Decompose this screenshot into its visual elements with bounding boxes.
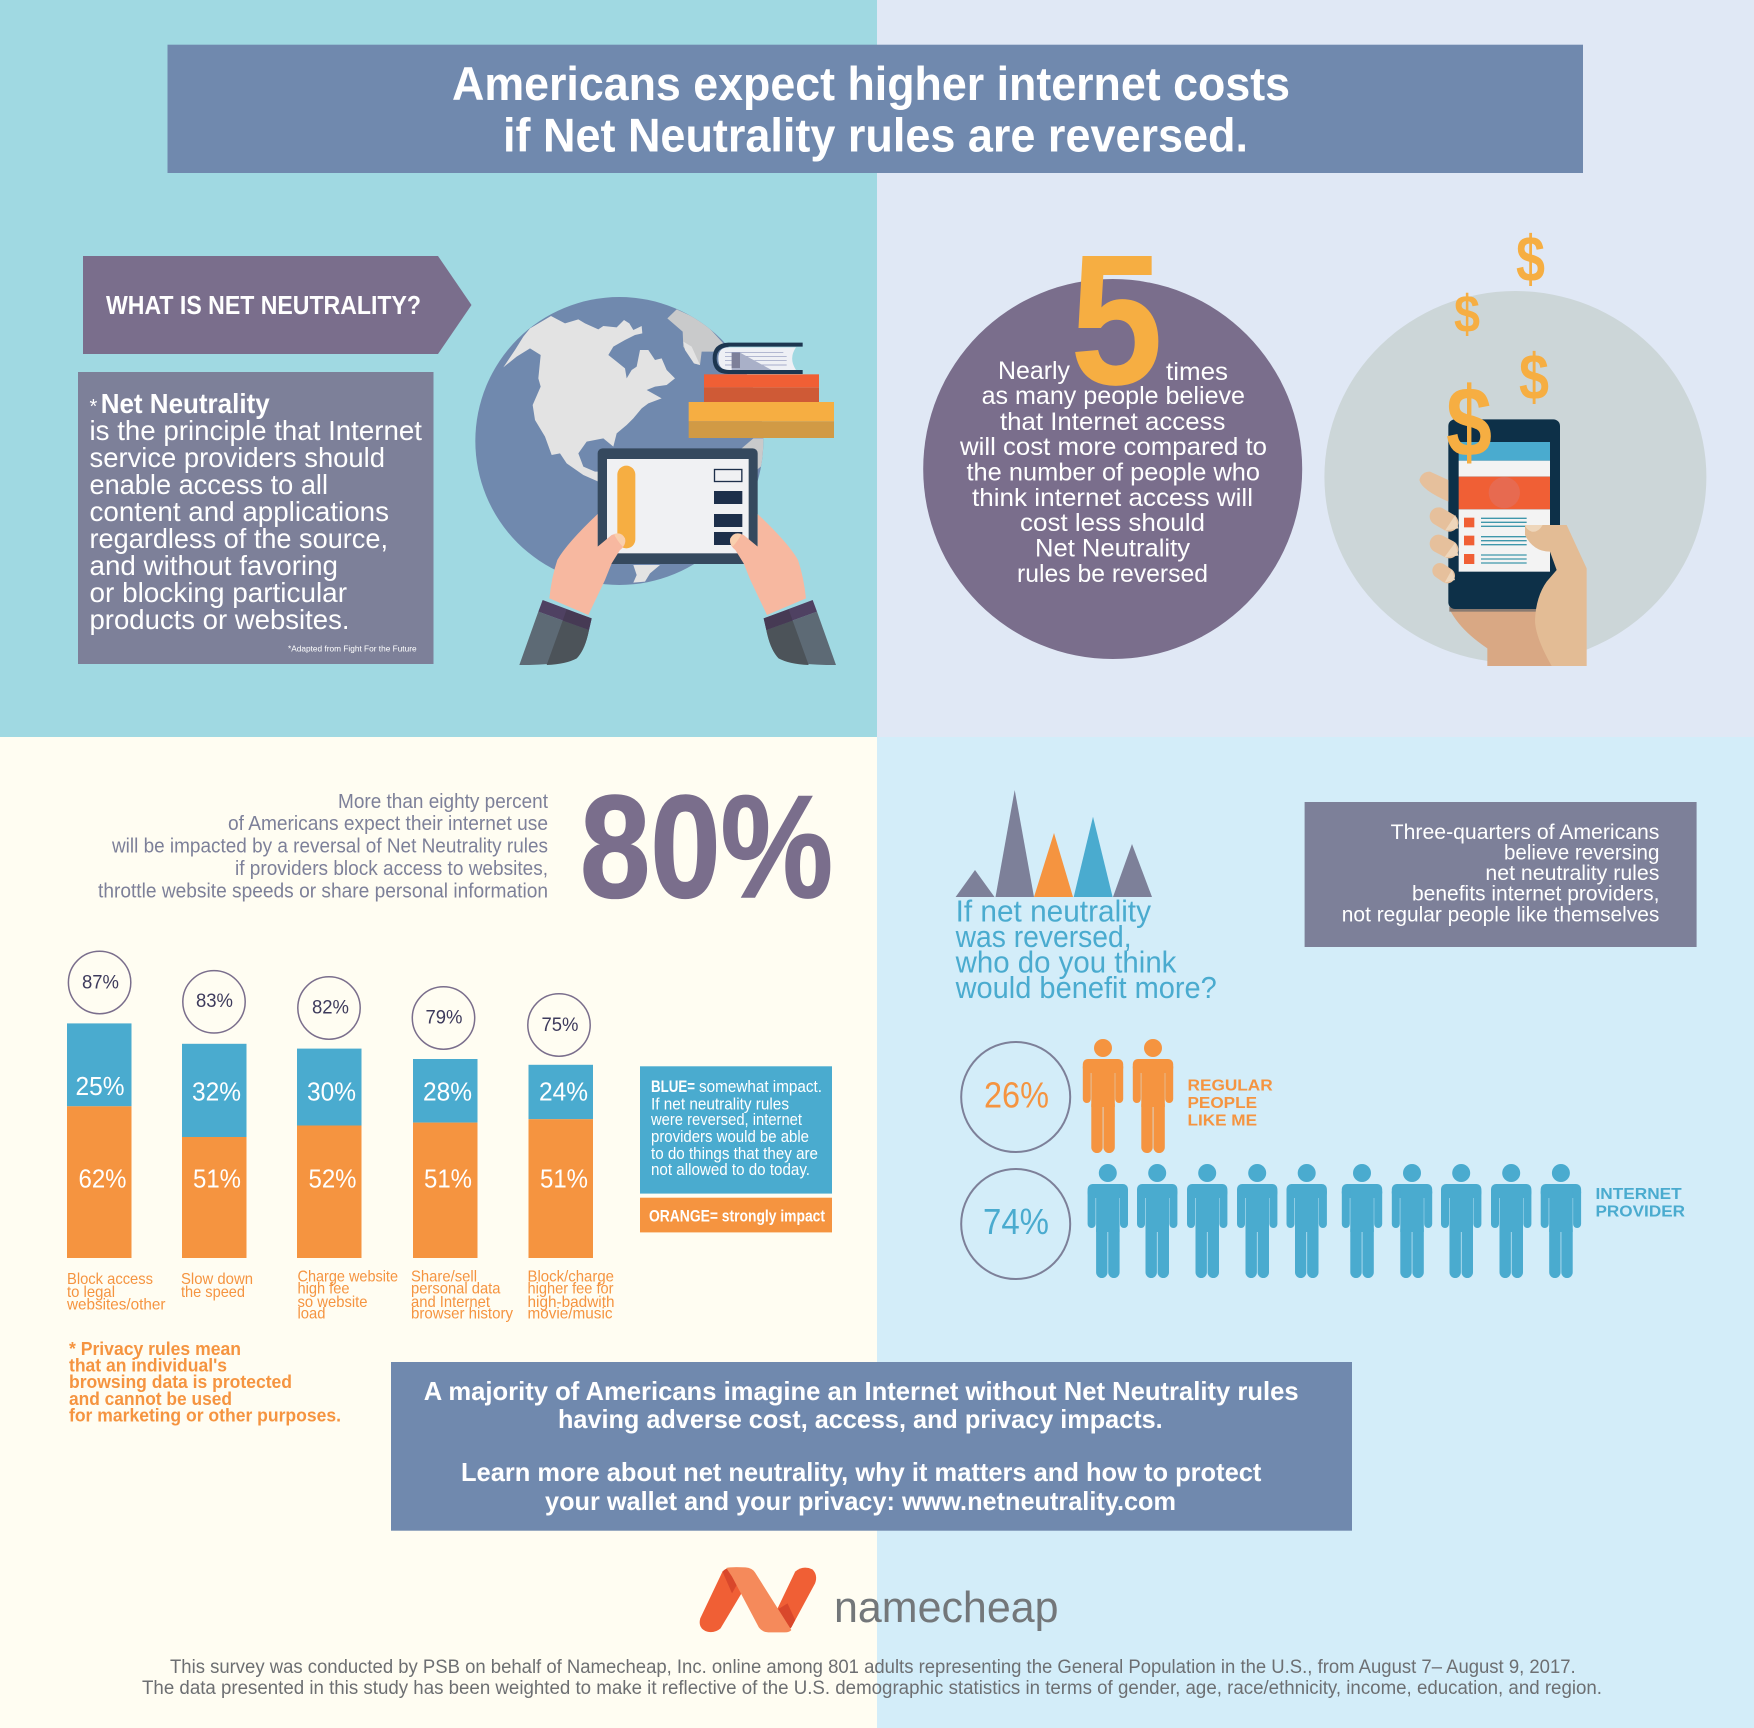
heading: who would benefit more: was reversed, bbox=[955, 919, 1132, 954]
banner: majority of Americans and call to action: Learn more about net neutrality, why it matters and how to protect bbox=[461, 1457, 1262, 1487]
legend: orange strongly impact bbox=[640, 1198, 832, 1232]
note: privacy rules bbox=[69, 1339, 341, 1426]
icon: left hand and sleeve bbox=[519, 514, 625, 665]
legend: blue somewhat impact: somewhat impact. bbox=[699, 1078, 822, 1096]
note: privacy rules: browsing data is protected bbox=[69, 1372, 292, 1392]
logo mark bbox=[700, 1567, 816, 1632]
legend: blue somewhat impact: providers would be able bbox=[651, 1128, 809, 1146]
bar: block/charge 75%: movie/music bbox=[528, 1306, 612, 1323]
bar: charge website 82%: 82% bbox=[312, 997, 349, 1018]
icon: globe bbox=[475, 297, 767, 585]
bar: block access 87%: 87% bbox=[82, 973, 119, 994]
bar: charge website 82%: so website bbox=[298, 1294, 368, 1311]
icon: phone and hand bbox=[1419, 419, 1587, 666]
icon: dollar signs: $ bbox=[1446, 366, 1492, 477]
bar: block access 87% bbox=[66, 951, 166, 1313]
text block: more than eighty percent: will be impacted by a reversal of Net Neutrality rules bbox=[111, 834, 548, 858]
icon: tablet bbox=[598, 448, 758, 564]
panel: net neutrality definition: regardless of the source, bbox=[90, 523, 388, 554]
bar: block/charge 75% bbox=[528, 994, 614, 1323]
heading: who would benefit more: would benefit more? bbox=[955, 970, 1217, 1005]
panel: net neutrality definition: enable access to all bbox=[90, 469, 328, 500]
bar: share/sell 79%: Share/sell bbox=[411, 1269, 477, 1286]
panel: net neutrality definition: is the principle that Internet bbox=[90, 415, 422, 446]
bar: block/charge 75%: 75% bbox=[542, 1015, 579, 1036]
stat: 26% regular people: REGULAR bbox=[1188, 1078, 1273, 1095]
stat: 74% internet provider: INTERNET bbox=[1596, 1186, 1682, 1203]
panel: net neutrality definition: products or websites. bbox=[90, 604, 350, 635]
banner: majority of Americans and call to action: having adverse cost, access, and privacy impacts. bbox=[558, 1404, 1163, 1434]
arrow heading: what is net neutrality bbox=[83, 256, 472, 354]
panel: nearly 5 times circle: that Internet access bbox=[1000, 408, 1225, 436]
text block: more than eighty percent bbox=[98, 790, 548, 902]
bar: charge website 82% bbox=[297, 977, 398, 1323]
icon: dollar signs bbox=[1446, 222, 1549, 477]
text block: more than eighty percent: of Americans expect their internet use bbox=[228, 812, 548, 835]
big number: 80%: 80% bbox=[580, 765, 833, 928]
bar: share/sell 79%: and Internet bbox=[411, 1294, 491, 1311]
bar: block/charge 75%: 51% bbox=[540, 1163, 588, 1193]
bar: block/charge 75%: Block/charge bbox=[528, 1269, 614, 1286]
stat: 74% internet provider: PROVIDER bbox=[1596, 1204, 1685, 1221]
panel: nearly 5 times circle: 5 bbox=[1070, 217, 1163, 424]
bar: slow down 83%: 51% bbox=[193, 1163, 241, 1193]
panel: nearly 5 times circle: the number of people who bbox=[966, 459, 1260, 487]
icon: dollar signs: $ bbox=[1454, 285, 1480, 344]
title banner: Americans expect higher internet costs bbox=[452, 57, 1290, 110]
heading: who would benefit more bbox=[955, 894, 1217, 1005]
logo: namecheap: namecheap bbox=[834, 1583, 1058, 1632]
bar: charge website 82%: high fee bbox=[298, 1280, 350, 1298]
panel: three-quarters of Americans: not regular people like themselves bbox=[1342, 904, 1659, 927]
legend: blue somewhat impact bbox=[640, 1066, 832, 1194]
banner: majority of Americans and call to action bbox=[391, 1362, 1352, 1531]
heading: who would benefit more: who do you think bbox=[955, 945, 1177, 980]
panel: nearly 5 times circle: as many people believe bbox=[982, 382, 1245, 410]
bar: block/charge 75%: high-badwith bbox=[528, 1294, 614, 1311]
panel: net neutrality definition: *Adapted from Fight For the Future bbox=[288, 644, 417, 654]
note: privacy rules: and cannot be used bbox=[69, 1389, 232, 1409]
logo: namecheap bbox=[700, 1567, 1058, 1632]
bar: charge website 82%: load bbox=[298, 1306, 326, 1323]
legend: blue somewhat impact: BLUE= bbox=[651, 1078, 695, 1096]
panel: three-quarters of Americans: believe reversing bbox=[1504, 841, 1659, 864]
bar: charge website 82%: Charge website bbox=[298, 1269, 398, 1286]
text block: more than eighty percent: throttle website speeds or share personal information bbox=[98, 880, 548, 902]
bar: block access 87%: 25% bbox=[76, 1071, 124, 1101]
banner: majority of Americans and call to action: A majority of Americans imagine an Internet without Net Neutrality rules bbox=[424, 1376, 1299, 1406]
heading: who would benefit more: If net neutrality bbox=[956, 894, 1151, 929]
title banner: if Net Neutrality rules are reversed. bbox=[503, 109, 1248, 162]
legend: blue somewhat impact: If net neutrality rules bbox=[651, 1096, 789, 1114]
bar: slow down 83%: the speed bbox=[181, 1284, 245, 1301]
icon: stack of books bbox=[689, 343, 834, 438]
panel: nearly 5 times circle: will cost more compared to bbox=[959, 433, 1267, 461]
bar: block/charge 75%: higher fee for bbox=[528, 1280, 614, 1298]
icon: dollar signs: $ bbox=[1516, 222, 1545, 295]
bar: share/sell 79%: 28% bbox=[423, 1076, 472, 1106]
bar: block access 87%: Block access bbox=[67, 1271, 153, 1288]
bar: share/sell 79%: personal data bbox=[411, 1280, 501, 1298]
panel: nearly 5 times circle bbox=[923, 217, 1302, 659]
note: privacy rules: that an individual's bbox=[69, 1356, 227, 1376]
note: privacy rules: for marketing or other purposes. bbox=[69, 1406, 341, 1426]
bar: share/sell 79%: 51% bbox=[424, 1163, 472, 1193]
note: privacy rules: * Privacy rules mean bbox=[69, 1339, 241, 1359]
bar: share/sell 79% bbox=[411, 987, 513, 1323]
icon: right hand and sleeve bbox=[730, 514, 836, 665]
grey circle backdrop bbox=[1324, 291, 1706, 663]
bar: share/sell 79%: browser history bbox=[411, 1306, 513, 1323]
panel: net neutrality definition: service providers should bbox=[90, 442, 385, 473]
illustration: phone in hand with dollar signs bbox=[1324, 222, 1706, 666]
illustration: globe, books and tablet in hands bbox=[475, 297, 836, 665]
bar: slow down 83% bbox=[181, 971, 253, 1301]
text block: more than eighty percent: More than eighty percent bbox=[338, 790, 548, 813]
icon: triangle mountains chart bbox=[956, 790, 1152, 897]
footer: survey note: The data presented in this study has been weighted to make it reflective of the U.S. demographic statistics in terms of gender, age, race/ethnicity, income, education, and region. bbox=[142, 1678, 1602, 1699]
panel: net neutrality definition bbox=[78, 372, 434, 664]
bar: slow down 83%: Slow down bbox=[181, 1271, 253, 1288]
footer: survey note bbox=[142, 1657, 1602, 1699]
bar: slow down 83%: 83% bbox=[196, 991, 233, 1012]
bar: block/charge 75%: 24% bbox=[539, 1076, 588, 1106]
stat: 26% regular people: LIKE ME bbox=[1188, 1113, 1257, 1130]
panel: net neutrality definition: Net Neutrality bbox=[101, 388, 270, 419]
footer: survey note: This survey was conducted by PSB on behalf of Namecheap, Inc. online among 801 adults representing the General Population in the U.S., from August 7– August 9, 2017. bbox=[170, 1657, 1576, 1678]
panel: net neutrality definition: * bbox=[90, 396, 98, 418]
stat: 26% regular people bbox=[961, 1039, 1273, 1153]
bar: charge website 82%: 30% bbox=[307, 1076, 356, 1106]
bar: block access 87%: websites/other bbox=[66, 1296, 166, 1313]
legend: orange strongly impact: ORANGE= strongly impact bbox=[649, 1208, 825, 1226]
panel: net neutrality definition: content and applications bbox=[90, 496, 389, 527]
legend: blue somewhat impact: were reversed, internet bbox=[650, 1111, 802, 1129]
stacked bar chart bbox=[66, 951, 614, 1323]
legend: blue somewhat impact: not allowed to do today. bbox=[651, 1161, 810, 1179]
text block: more than eighty percent: if providers block access to websites, bbox=[235, 857, 548, 880]
legend: blue somewhat impact: to do things that they are bbox=[651, 1145, 818, 1163]
banner: majority of Americans and call to action: your wallet and your privacy: www.netneutrality.com bbox=[545, 1486, 1176, 1516]
title banner bbox=[168, 45, 1583, 173]
bar: charge website 82%: 52% bbox=[308, 1163, 356, 1193]
panel: three-quarters of Americans: net neutrality rules bbox=[1485, 862, 1659, 885]
panel: nearly 5 times circle: Net Neutrality bbox=[1035, 535, 1190, 563]
panel: three-quarters of Americans: Three-quarters of Americans bbox=[1391, 821, 1659, 844]
panel: three-quarters of Americans bbox=[1305, 802, 1697, 947]
panel: nearly 5 times circle: think internet access will bbox=[972, 484, 1253, 512]
stat: 26% regular people: PEOPLE bbox=[1188, 1095, 1257, 1112]
stat: 74% internet provider: 74% bbox=[983, 1201, 1049, 1242]
bar: slow down 83%: 32% bbox=[192, 1076, 241, 1106]
panel: nearly 5 times circle: rules be reversed bbox=[1017, 560, 1208, 588]
stat: 74% internet provider bbox=[961, 1164, 1685, 1279]
panel: nearly 5 times circle: times bbox=[1166, 358, 1228, 386]
stat: 26% regular people: 26% bbox=[984, 1075, 1049, 1116]
panel: nearly 5 times circle: Nearly bbox=[998, 357, 1070, 385]
panel: net neutrality definition: or blocking particular bbox=[90, 577, 347, 608]
arrow heading: what is net neutrality: WHAT IS NET NEUTRALITY? bbox=[106, 292, 421, 320]
icon: dollar signs: $ bbox=[1519, 340, 1549, 413]
panel: net neutrality definition: and without favoring bbox=[90, 550, 338, 581]
bar: share/sell 79%: 79% bbox=[426, 1007, 463, 1028]
panel: three-quarters of Americans: benefits internet providers, bbox=[1412, 883, 1659, 906]
panel: nearly 5 times circle: cost less should bbox=[1020, 509, 1205, 537]
bar: block access 87%: to legal bbox=[67, 1284, 115, 1301]
bar: block access 87%: 62% bbox=[78, 1163, 126, 1193]
